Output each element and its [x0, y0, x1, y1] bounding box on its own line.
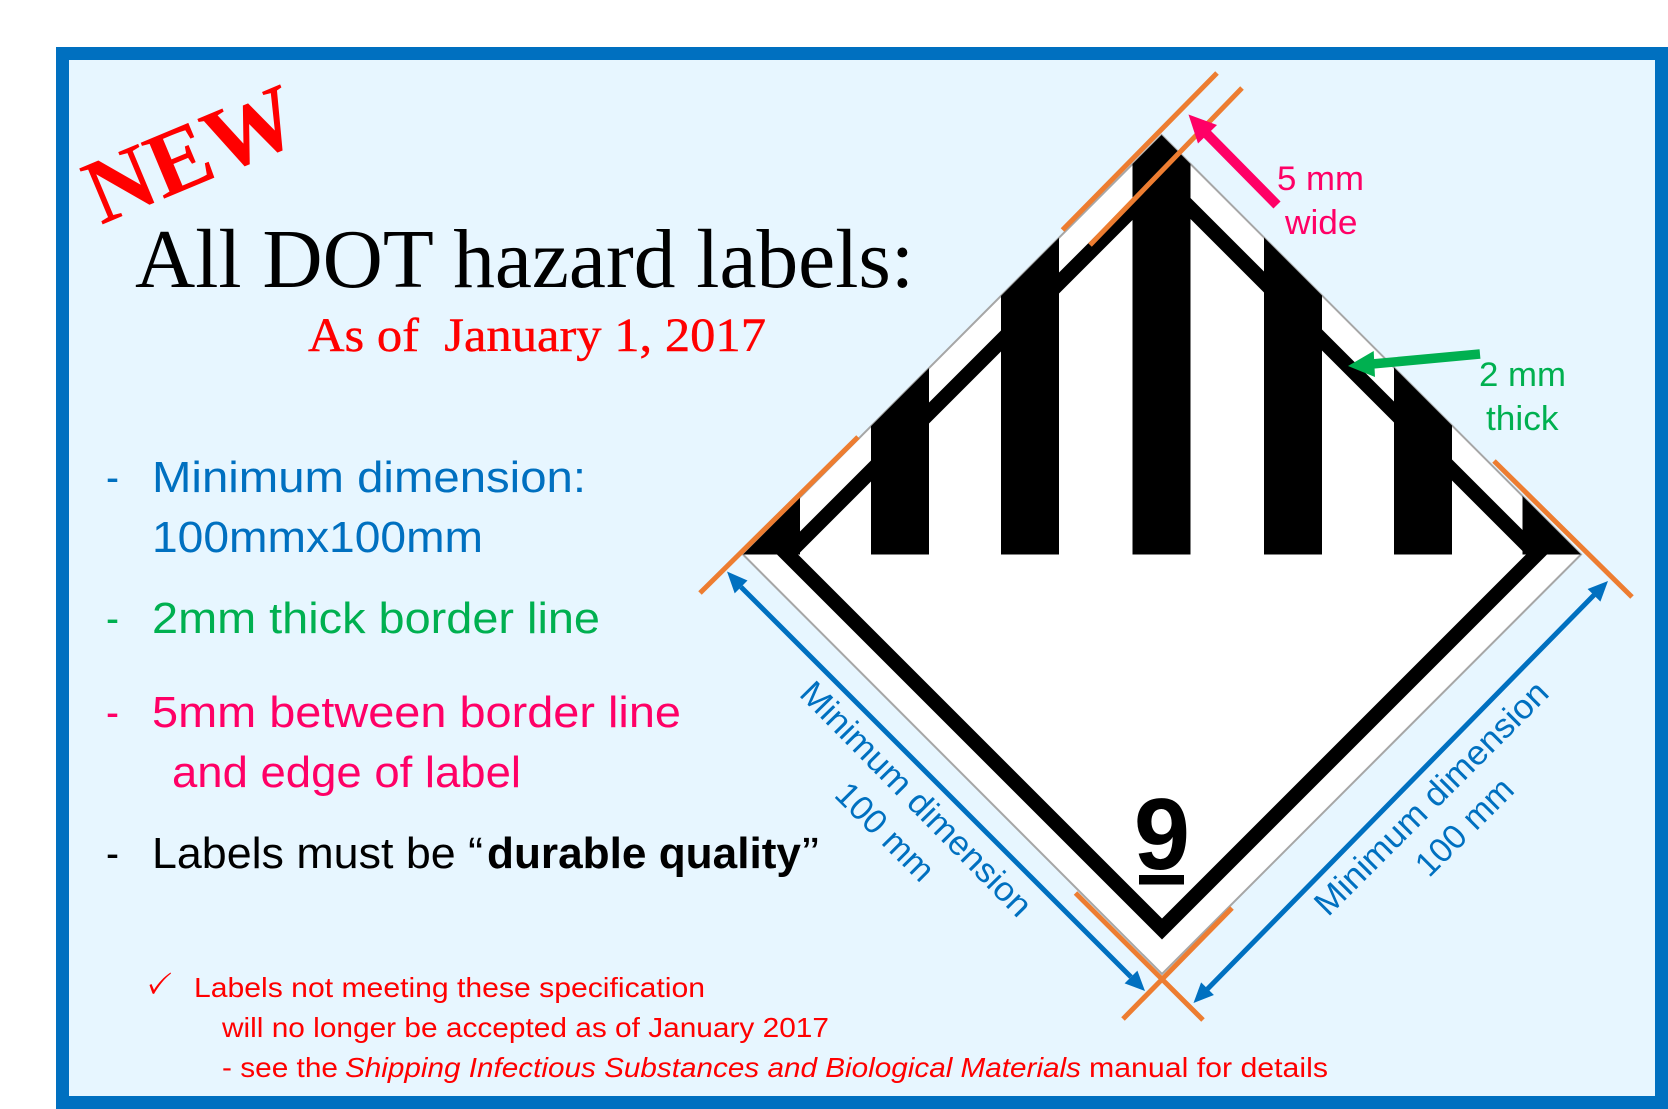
- dimension label: left edge: 100 mm: [827, 775, 942, 889]
- requirement: spacing to edge: -: [106, 688, 119, 737]
- callout: 5 mm wide: wide: [1284, 204, 1358, 242]
- hazard label: class 9 diamond: [740, 130, 1582, 974]
- requirement: minimum dimension: -: [106, 453, 119, 502]
- arrow: 5 mm wide: [1188, 114, 1277, 205]
- callout: 5 mm wide: 5 mm: [1277, 160, 1364, 198]
- requirement: minimum dimension: [106, 453, 586, 562]
- requirement: spacing to edge: [106, 688, 681, 797]
- title: All DOT hazard labels:: [135, 213, 914, 306]
- requirement: durable quality: Labels must be “: [152, 829, 483, 878]
- note: non-compliant labels: Shipping Infectious Substances and Biological Materials: [345, 1052, 1081, 1083]
- requirement: spacing to edge: and edge of label: [172, 748, 521, 797]
- note: non-compliant labels: - see the: [222, 1052, 338, 1083]
- dimension arrow: left edge: [727, 572, 1145, 991]
- requirement: border line: -: [106, 594, 119, 643]
- arrow: 2 mm thick: [1348, 351, 1480, 377]
- requirement: durable quality: -: [106, 829, 119, 878]
- icon: check mark: [150, 972, 171, 994]
- requirement: border line: 2mm thick border line: [152, 594, 600, 643]
- label background: [743, 135, 1581, 974]
- dimension label: left edge: Minimum dimension: [792, 674, 1039, 925]
- note: non-compliant labels: will no longer be accepted as of January 2017: [221, 1012, 829, 1043]
- requirement: durable quality: [106, 829, 819, 878]
- requirement: durable quality: ”: [802, 829, 819, 878]
- note: non-compliant labels: [194, 972, 1328, 1083]
- subtitle: date: As of January 1, 2017: [308, 309, 766, 362]
- NEW stamp: NEW: [70, 65, 313, 244]
- requirement: minimum dimension: Minimum dimension:: [152, 453, 586, 502]
- callout: 2 mm thick: [1479, 356, 1566, 438]
- label stripes: [740, 130, 1582, 554]
- label border line: [777, 170, 1547, 940]
- measure guides: orange lines: [700, 73, 1632, 1020]
- requirement: durable quality: durable quality: [487, 829, 802, 878]
- callout: 2 mm thick: 2 mm: [1479, 356, 1566, 394]
- callout: 2 mm thick: thick: [1486, 400, 1560, 438]
- note: non-compliant labels: manual for details: [1089, 1052, 1328, 1083]
- requirement: minimum dimension: 100mmx100mm: [152, 513, 483, 562]
- callout: 5 mm wide: [1277, 160, 1364, 242]
- dimension label: right edge: 100 mm: [1408, 770, 1522, 884]
- note: non-compliant labels: Labels not meeting these specification: [194, 972, 705, 1003]
- requirement: spacing to edge: 5mm between border line: [152, 688, 681, 737]
- dimension arrow: right edge: [1194, 581, 1608, 1003]
- dimension label: right edge: Minimum dimension: [1307, 674, 1556, 923]
- class number 9: 9: [1134, 779, 1190, 891]
